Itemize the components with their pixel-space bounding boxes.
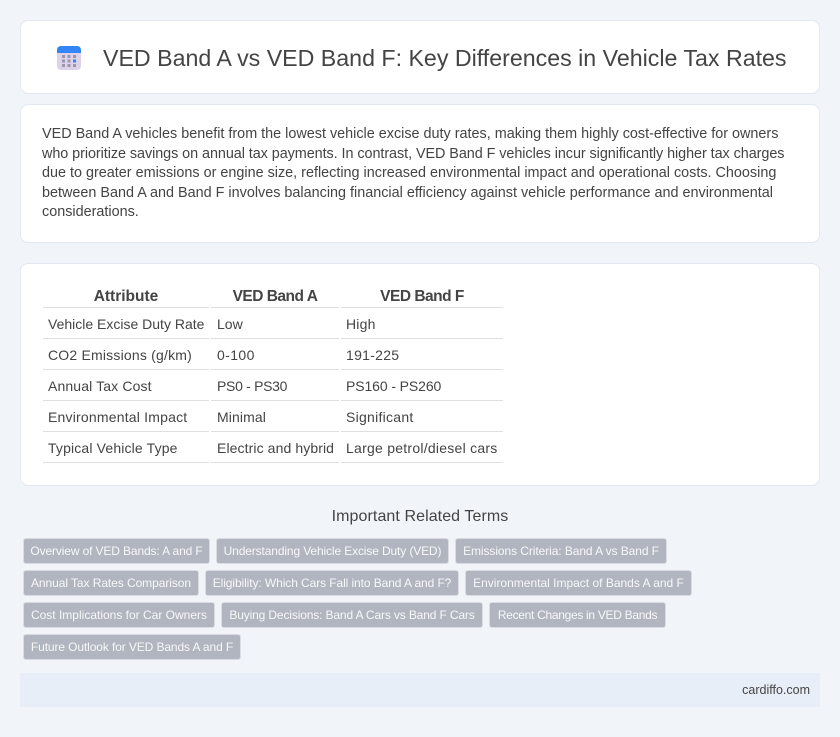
tag list: related terms: Recent Changes in VED Bands (498, 608, 657, 622)
text block: intro: VED Band A vehicles benefit from the lowest vehicle excise duty rates, making them highly cost-effective for owners (42, 126, 778, 142)
tag list: related terms: Understanding Vehicle Excise Duty (VED) (224, 544, 441, 558)
text block: intro: between Band A and Band F involves balancing financial efficiency against vehicle performance and environmental (42, 184, 773, 200)
footer credit: cardiffo.com (742, 683, 810, 697)
table: attributes: PS160 - PS260 (346, 378, 441, 394)
tag list: related terms: Eligibility: Which Cars Fall into Band A and F? (213, 576, 451, 590)
table: attributes: Minimal (217, 409, 266, 425)
table: attributes: Environmental Impact (48, 409, 187, 425)
tag list: related terms: Cost Implications for Car Owners (31, 608, 207, 622)
tag list: related terms: Environmental Impact of Bands A and F (473, 576, 684, 590)
tag list: related terms (23, 538, 692, 660)
table: attributes: High (346, 316, 376, 332)
title: VED Band A vs VED Band F: Key Differences in Vehicle Tax Rates (103, 45, 787, 71)
heading: related terms: Important Related Terms (332, 508, 508, 525)
tag list: related terms: Buying Decisions: Band A Cars vs Band F Cars (229, 608, 475, 622)
table: attributes: 0-100 (217, 347, 255, 363)
table: attributes: Typical Vehicle Type (48, 440, 178, 456)
table: attributes (43, 288, 503, 463)
panel: intro paragraph (20, 104, 820, 243)
text block: intro: due to greater emissions or engine size, reflecting increased environmental impact and operational costs. Choosing (42, 165, 776, 181)
text block: intro (42, 126, 784, 220)
table header: VED Band F (380, 288, 464, 305)
icon: calendar (57, 46, 81, 70)
tag list: related terms: Overview of VED Bands: A and F (30, 544, 203, 558)
table: attributes: CO2 Emissions (g/km) (48, 347, 192, 363)
table: attributes: PS0 - PS30 (217, 378, 287, 394)
table: attributes: Large petrol/diesel cars (346, 440, 498, 456)
table header: Attribute (94, 288, 158, 305)
table: attributes: Annual Tax Cost (48, 378, 152, 394)
tag list: related terms: Annual Tax Rates Comparison (31, 576, 191, 590)
tag list: related terms: Future Outlook for VED Bands A and F (31, 640, 233, 654)
table: attributes: Significant (346, 409, 414, 425)
footer bar (20, 673, 820, 707)
table: attributes: Electric and hybrid (217, 440, 334, 456)
table: attributes: 191-225 (346, 347, 399, 363)
tag list: related terms: Emissions Criteria: Band A vs Band F (463, 544, 659, 558)
table: attributes: Vehicle Excise Duty Rate (48, 316, 204, 332)
panel: title header (20, 20, 820, 94)
table header: VED Band A (233, 288, 317, 305)
text block: intro: who prioritize savings on annual tax payments. In contrast, VED Band F vehicles incur significantly higher tax charges (42, 146, 784, 162)
table header (94, 288, 464, 305)
table: attributes: Low (217, 316, 243, 332)
text block: intro: considerations. (42, 204, 139, 220)
panel: comparison table (20, 263, 820, 486)
